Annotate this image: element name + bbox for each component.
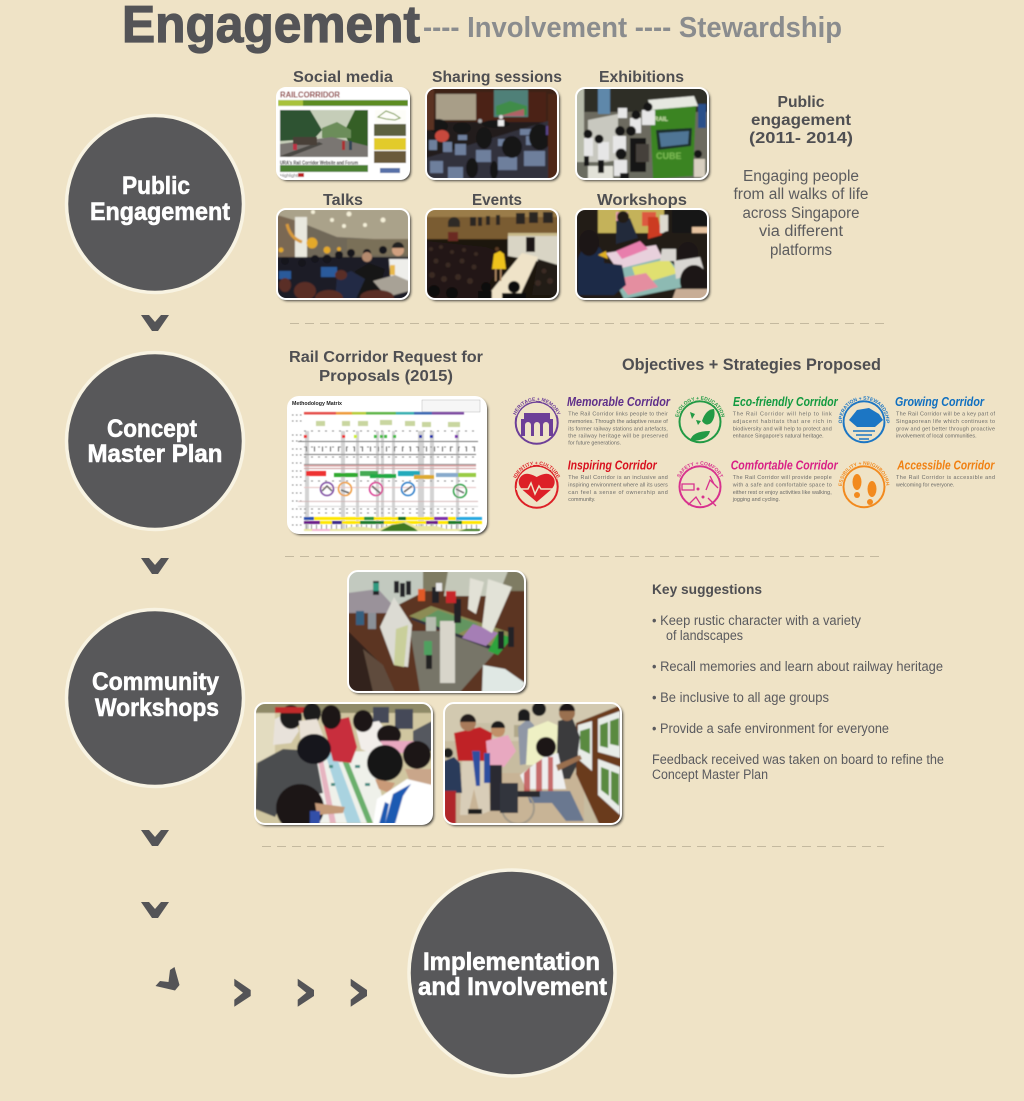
arrow: down chevron 1 [141,315,169,331]
panel: Memorable Corridor: its former railway stations and artefacts, [568,426,668,432]
icon: operation + stewardship [838,396,890,444]
heading: Talks: Talks [323,192,363,209]
text block: public engagement summary: from all walks of life [734,186,868,203]
text block: key suggestions: Feedback received was taken on board to refine the [652,752,944,767]
panel: Memorable Corridor: The Rail Corridor links people to their [568,412,668,418]
arrow: down chevron 3 [141,830,169,846]
photo: social media website screenshot: Highlights [280,173,301,178]
photo: exhibition with green kiosk [576,88,708,179]
stage circle: Community Workshops [66,610,244,786]
icon: ecology + education: ECOLOGY + EDUCATION [675,396,725,418]
heading: Rail Corridor Request for Proposals: Rail Corridor Request for [289,349,483,366]
stage circle: Community Workshops: Workshops [95,694,219,722]
photo: sharing session audience [426,88,558,179]
chart: methodology matrix [288,397,486,533]
photo: talks in lecture theatre [277,209,409,306]
stage circle: Implementation and Involvement [409,870,615,1076]
photo: workshop with sticky notes [576,209,708,300]
text block: public engagement summary: engagement [751,112,852,129]
text block: public engagement summary [734,94,868,259]
panel: Eco-friendly Corridor: Eco-friendly Corridor [733,395,839,409]
photo: exhibition with green kiosk: CUBE [656,151,682,161]
panel: Accessible Corridor: The Rail Corridor is accessible and [896,475,995,481]
heading: Rail Corridor Request for Proposals [289,349,483,385]
stage circle: Concept Master Plan: Concept [107,415,198,443]
panel: Comfortable Corridor: Comfortable Corridor [731,458,839,472]
icon: ecology + education [675,396,725,444]
photo: social media website screenshot: RAILCORRIDOR [280,90,340,100]
arrow: down chevron 2 [141,558,169,574]
heading: Objectives + Strategies Proposed: Objectives + Strategies Proposed [622,355,881,374]
panel: Memorable Corridor: for future generations. [568,440,621,446]
panel: Eco-friendly Corridor [675,395,839,444]
panel: Growing Corridor: grow and get better through proactive [896,426,995,432]
text block: public engagement summary: (2011- 2014) [749,130,853,147]
panel: Comfortable Corridor: either rest or enjoy activities like walking, [733,490,832,496]
photo: social media website screenshot [277,88,409,179]
panel: Accessible Corridor: Accessible Corridor [896,458,995,472]
text block: key suggestions: • Keep rustic character with a variety [652,613,861,628]
panel: Inspiring Corridor: Inspiring Corridor [568,458,658,472]
icon: identity + culture [513,462,560,509]
panel: Accessible Corridor [838,458,995,508]
title: ---- Involvement ---- Stewardship [423,12,842,44]
text block: public engagement summary: platforms [770,242,832,259]
panel: Growing Corridor: involvement of local communities. [896,434,977,440]
panel: Inspiring Corridor: inspiring environment where all its users [568,482,668,488]
photo: fashion show event [426,209,558,300]
photo: community workshop around plan [255,703,432,832]
arrow: right chevron 2 [298,979,314,1007]
icon: accessibility + neighbourhood [838,461,890,508]
panel: Inspiring Corridor: can feel a sense of ownership and [568,490,668,496]
icon: accessibility + neighbourhood: ACCESSIBILITY + NEIGHBOURHOOD [838,461,890,486]
panel: Eco-friendly Corridor: biodiversity and will help to protect and [733,426,832,432]
text block: key suggestions: of landscapes [666,628,743,643]
panel: Comfortable Corridor: with a safe and comfortable space to [732,482,832,488]
heading: Events: Events [472,192,522,209]
stage circle: Community Workshops: Community [92,668,219,696]
stage circle: Concept Master Plan [66,352,244,530]
photo: social media website screenshot: URA's Rail Corridor Website and Forum [280,160,358,166]
stage circle: Concept Master Plan: Master Plan [88,440,222,468]
panel: Growing Corridor: Singaporean life which continues to [896,419,995,425]
text block: key suggestions: Key suggestions [652,582,762,597]
arrow: down chevron 4 [141,902,169,918]
photo: exhibition with green kiosk: RAIL [654,117,668,123]
panel: Eco-friendly Corridor: enhance Singapore's natural heritage. [733,434,824,440]
heading: Sharing sessions: Sharing sessions [432,69,562,86]
photo: exhibition hall from above [348,571,525,692]
panel: Memorable Corridor: Memorable Corridor [567,395,671,409]
panel: Growing Corridor: Growing Corridor [895,395,985,409]
icon: safety + comfort [677,461,724,508]
heading: Social media: Social media [293,69,393,86]
icon: operation + stewardship: OPERATION + STEWARDSHIP [838,396,890,424]
title [122,0,842,54]
text block: key suggestions: • Recall memories and learn about railway heritage [652,659,943,674]
stage circle: Implementation and Involvement: and Involvement [418,973,608,1001]
panel: Memorable Corridor: the railway heritage will be preserved [568,434,668,440]
arrow: right chevron 3 [351,979,367,1007]
panel: Accessible Corridor: welcoming for everyone. [895,482,954,488]
text block: public engagement summary: across Singapore [742,205,860,222]
icon: heritage + memory: HERITAGE + MEMORY [512,397,560,416]
text block: key suggestions [652,582,944,782]
panel: Comfortable Corridor [677,458,839,508]
stage circle: Public Engagement: Engagement [90,198,231,226]
panel: Memorable Corridor [512,395,671,446]
panel: Eco-friendly Corridor: adjacent habitats that are rich in [733,419,832,425]
panel: Growing Corridor [838,395,996,444]
panel: Inspiring Corridor: community. [568,497,595,503]
panel: Inspiring Corridor: The Rail Corridor is an inclusive and [568,475,668,481]
heading: Exhibitions: Exhibitions [599,69,684,86]
arrow: corner chevron [156,967,180,990]
stage circle: Public Engagement: Public [122,172,190,200]
text block: key suggestions: • Be inclusive to all age groups [652,690,829,705]
heading: Workshops: Workshops [597,192,687,209]
stage circle: Implementation and Involvement: Implementation [423,948,600,976]
icon: heritage + memory [512,397,560,445]
panel: Eco-friendly Corridor: The Rail Corridor will help to link [733,412,832,418]
panel: Inspiring Corridor [513,458,668,509]
panel: public engagement platforms [277,69,708,306]
text block: public engagement summary: via different [759,223,844,240]
panel: Comfortable Corridor: The Rail Corridor will provide people [733,475,832,481]
text block: public engagement summary: Engaging people [743,168,859,185]
panel: Growing Corridor: The Rail Corridor will be a key part of [896,412,996,418]
stage circle: Public Engagement [66,116,244,292]
text block: key suggestions: Concept Master Plan [652,767,768,782]
arrow: right chevron 1 [234,979,251,1007]
chart: methodology matrix: Methodology Matrix [292,401,342,407]
icon: safety + comfort: SAFETY + COMFORT [677,461,724,478]
icon: identity + culture: IDENTITY + CULTURE [513,462,560,480]
photo: wheelchair user viewing display boards [443,702,621,824]
heading: Rail Corridor Request for Proposals: Proposals (2015) [319,368,453,385]
text block: public engagement summary: Public [778,94,825,111]
text block: key suggestions: • Provide a safe environment for everyone [652,721,889,736]
panel: Comfortable Corridor: jogging and cycling. [732,497,780,503]
panel: Memorable Corridor: memories. Through the adaptive reuse of [568,419,668,425]
